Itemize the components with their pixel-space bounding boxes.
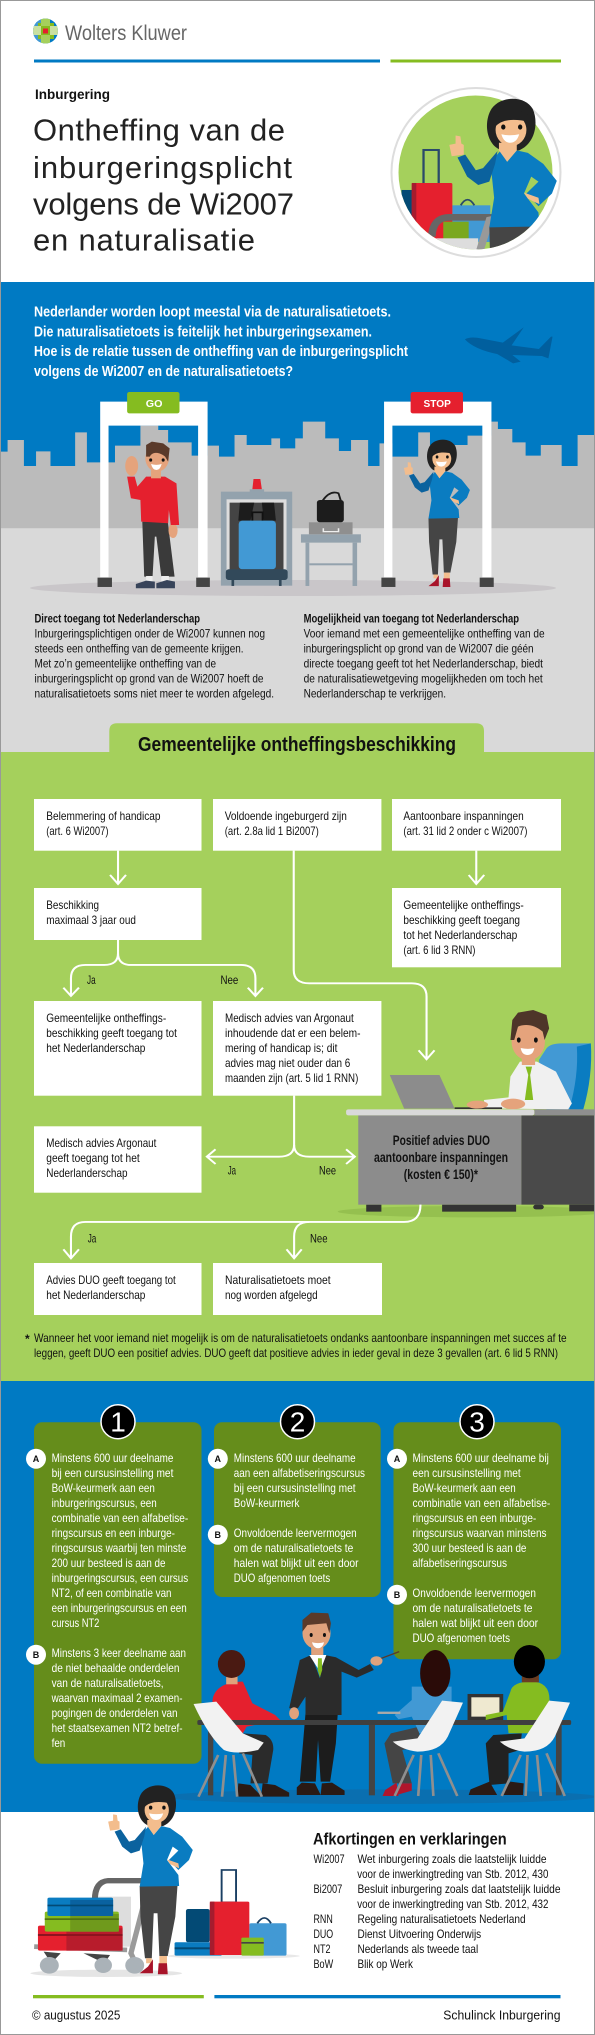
column: direct toegang: inburgeringsplicht op grond van de Wi2007 hoeft de — [34, 672, 264, 686]
number 1: 1 — [110, 1406, 126, 1438]
text A: BoW-keurmerk aan een — [412, 1481, 516, 1495]
box: Gemeentelijke ontheffingsbeschikking RNN: beschikking geeft toegang — [403, 913, 520, 927]
box: ontheffingsbeschikking geeft toegang — [34, 1001, 202, 1096]
text B — [234, 1526, 359, 1585]
box: Medisch advies Argonaut: Medisch advies Argonaut — [46, 1136, 157, 1150]
box: Voldoende ingeburgerd zijn: (art. 2.8a lid 1 Bi2007) — [225, 824, 319, 838]
text A — [52, 1451, 188, 1630]
text B: DUO afgenomen toets — [234, 1571, 330, 1585]
abbreviations list — [314, 1852, 561, 1971]
text A: combinatie van een alfabetise- — [52, 1511, 188, 1525]
box: Medisch advies van Argonaut: mering of handicap is; dit — [225, 1041, 338, 1055]
box: Medisch advies Argonaut — [34, 1126, 202, 1193]
text A: BoW-keurmerk — [234, 1496, 300, 1510]
column: mogelijkheid van toegang: inburgeringsplicht op grond van de Wi2007 die géén — [304, 642, 534, 656]
abbreviations list: Wet inburgering zoals die laatstelijk luidde — [358, 1852, 547, 1866]
box: Beschikking maximaal 3 jaar oud — [34, 888, 202, 940]
trolley — [34, 1881, 152, 1974]
box: ontheffingsbeschikking geeft toegang: Gemeentelijke ontheffings- — [46, 1011, 166, 1025]
woman at STOP gate — [404, 440, 470, 587]
man in red waving — [125, 442, 179, 588]
abbreviations list: Regeling naturalisatietoets Nederland — [358, 1912, 526, 1926]
text B: Onvoldoende leervermogen — [412, 1586, 536, 1600]
text A: bij een cursusinstelling met — [234, 1481, 356, 1495]
text A: Minstens 600 uur deelname bij — [412, 1451, 549, 1465]
column: direct toegang: Direct toegang tot Nederlanderschap — [34, 612, 200, 626]
illustration: luggage and trolley with woman — [30, 1785, 300, 1977]
title: volgens de Wi2007 — [33, 187, 294, 222]
intro text: volgens de Wi2007 en de naturalisatietoets? — [34, 364, 293, 380]
table with bags — [301, 493, 361, 586]
illustration: meeting with presenter — [194, 1613, 571, 1797]
chair 1 — [194, 1702, 264, 1797]
box: Naturalisatietoets moet nog worden afgelegd — [213, 1263, 382, 1315]
panel 2 — [208, 1405, 381, 1597]
abbreviations list: Wi2007 — [314, 1852, 345, 1866]
marker B: B — [215, 1530, 222, 1540]
box: Naturalisatietoets moet nog worden afgelegd: nog worden afgelegd — [225, 1288, 318, 1302]
box: Medisch advies van Argonaut: Medisch advies van Argonaut — [225, 1011, 354, 1025]
box: Gemeentelijke ontheffingsbeschikking RNN — [392, 888, 561, 967]
marker A: A — [33, 1454, 40, 1464]
panel: blue background — [0, 1381, 595, 1812]
gate GO — [98, 392, 210, 587]
box: Medisch advies van Argonaut: inhoudende dat er een belem- — [225, 1026, 360, 1040]
text A — [234, 1451, 365, 1510]
box: Positief advies DUO — [374, 1133, 508, 1182]
text B: de niet behaalde onderdelen — [52, 1661, 180, 1675]
labels: Ja and Nee third branch: Nee — [310, 1231, 328, 1245]
marker A — [26, 1449, 46, 1469]
text B: Minstens 3 keer deelname aan — [52, 1646, 186, 1660]
text B: het staatsexamen NT2 betref- — [52, 1721, 182, 1735]
marker B — [26, 1645, 46, 1665]
abbreviations list: NT2 — [314, 1942, 331, 1956]
box: Advies DUO: het Nederlanderschap — [46, 1288, 146, 1302]
text A: ringscursus waarbij ten minste — [52, 1541, 187, 1555]
abbreviations heading: Afkortingen en verklaringen — [313, 1829, 507, 1848]
labels: Ja and Nee second branch: Ja — [228, 1163, 236, 1177]
box: Medisch advies van Argonaut — [213, 1001, 381, 1096]
box: Aantoonbare inspanningen — [392, 799, 561, 851]
person in red — [213, 1650, 280, 1733]
gate STOP — [381, 392, 494, 587]
abbreviations list: Dienst Uitvoering Onderwijs — [358, 1927, 481, 1941]
box: Belemmering of handicap: (art. 6 Wi2007) — [46, 824, 109, 838]
text B: fen — [52, 1736, 65, 1750]
text B: waarvan maximaal 2 examen- — [51, 1691, 182, 1705]
number 2: 2 — [290, 1406, 305, 1438]
column: direct toegang: Met zo’n gemeentelijke ontheffing van de — [34, 657, 216, 671]
text A: inburgeringscursus, een — [52, 1496, 157, 1510]
presenter trousers — [297, 1713, 345, 1795]
abbreviations list: Blik op Werk — [358, 1957, 414, 1971]
illustration: security scene GO and STOP — [98, 392, 494, 588]
number 1 — [101, 1405, 135, 1439]
footer brand: Schulinck Inburgering — [443, 2007, 560, 2022]
illustration: woman in circle with luggage — [390, 87, 562, 258]
box: Positief advies DUO: (kosten € 150)* — [404, 1167, 479, 1182]
column: direct toegang: Inburgeringsplichtigen onder de Wi2007 kunnen nog — [34, 627, 265, 641]
labels: Ja and Nee first branch: Nee — [220, 973, 239, 987]
marker A: A — [394, 1454, 401, 1464]
column: mogelijkheid van toegang — [304, 612, 545, 701]
text B: Onvoldoende leervermogen — [234, 1526, 357, 1540]
labels: Ja and Nee second branch — [228, 1163, 336, 1177]
number 3: 3 — [469, 1406, 485, 1438]
box: Advies DUO: Advies DUO geeft toegang tot — [46, 1273, 176, 1287]
box: ontheffingsbeschikking geeft toegang: beschikking geeft toegang tot — [46, 1026, 177, 1040]
chair 3 — [500, 1701, 570, 1796]
text A: BoW-keurmerk aan een — [52, 1481, 155, 1495]
footer date: © augustus 2025 — [32, 2007, 120, 2022]
text B: van de naturalisatietoets, — [52, 1676, 164, 1690]
abbreviations list: Bi2007 — [314, 1882, 343, 1896]
header background — [0, 0, 595, 282]
box: Gemeentelijke ontheffingsbeschikking RNN: tot het Nederlanderschap — [403, 928, 518, 942]
footnote — [25, 1331, 567, 1360]
box: Positief advies DUO: aantoonbare inspanningen — [374, 1150, 508, 1165]
text A: Minstens 600 uur deelname — [234, 1451, 356, 1465]
marker A: A — [215, 1454, 222, 1464]
labels: Ja and Nee second branch: Nee — [319, 1163, 336, 1177]
marker B: B — [394, 1590, 401, 1600]
abbreviations list: voor de inwerkingtreding van Stb. 2012, 432 — [357, 1897, 549, 1911]
box: ontheffingsbeschikking geeft toegang: het Nederlanderschap — [46, 1041, 146, 1055]
box: Aantoonbare inspanningen: Aantoonbare inspanningen — [403, 809, 524, 823]
box: Beschikking maximaal 3 jaar oud: maximaal 3 jaar oud — [46, 913, 136, 927]
marker A — [208, 1449, 228, 1469]
intro text: Die naturalisatietoets is feitelijk het inburgeringsexamen. — [34, 325, 372, 341]
woman with thumb up — [108, 1785, 193, 1974]
labels: Ja and Nee third branch: Ja — [88, 1231, 97, 1245]
suitcases on trolley — [38, 1898, 123, 1951]
x-ray scanner with suitcase — [221, 479, 292, 586]
text A: een inburgeringscursus en een — [52, 1601, 187, 1615]
intro text — [34, 305, 408, 380]
text A: combinatie van een alfabetise- — [412, 1496, 550, 1510]
footer rule — [33, 1995, 560, 1998]
text B: om de naturalisatietoets te — [412, 1601, 533, 1615]
box: Voldoende ingeburgerd zijn — [213, 799, 381, 851]
text A: cursus NT2 — [52, 1616, 100, 1630]
box: Voldoende ingeburgerd zijn: Voldoende ingeburgerd zijn — [225, 809, 347, 823]
text A: NT2, of een combinatie van — [52, 1586, 172, 1600]
presenter — [289, 1613, 399, 1719]
icon: airplane — [465, 327, 553, 363]
abbreviations list: DUO — [314, 1927, 333, 1941]
illustration: desk with man — [338, 1010, 595, 1217]
arrows: flowchart top — [63, 851, 484, 1059]
box: Naturalisatietoets moet nog worden afgelegd: Naturalisatietoets moet — [225, 1273, 331, 1287]
text A: 200 uur besteed is aan de — [52, 1556, 166, 1570]
gate STOP: STOP — [424, 400, 451, 410]
text A: aan een alfabetiseringscursus — [234, 1466, 365, 1480]
table legs — [208, 1723, 562, 1795]
box: Gemeentelijke ontheffingsbeschikking RNN: (art. 6 lid 3 RNN) — [403, 943, 476, 957]
text B — [412, 1586, 538, 1645]
number 2 — [280, 1405, 314, 1439]
marker B: B — [33, 1650, 40, 1660]
logo: Wolters Kluwer — [33, 18, 187, 45]
column: mogelijkheid van toegang: directe toegang geeft tot het Nederlanderschap, biedt — [304, 657, 544, 671]
table top — [197, 1720, 571, 1725]
column: mogelijkheid van toegang: Mogelijkheid van toegang tot Nederlanderschap — [304, 612, 519, 626]
box: Medisch advies Argonaut: Nederlanderschap — [46, 1166, 128, 1180]
gate GO: GO — [146, 400, 162, 410]
abbreviations list: Besluit inburgering zoals dat laatstelijk luidde — [358, 1882, 561, 1896]
number 3 — [460, 1405, 494, 1439]
panel 3 — [387, 1405, 561, 1659]
text A: bij een cursusinstelling met — [52, 1466, 174, 1480]
marker B — [387, 1585, 407, 1605]
text A: alfabetiseringscursus — [412, 1556, 507, 1570]
abbreviations list: Nederlands als tweede taal — [358, 1942, 478, 1956]
person in green legs — [469, 1733, 524, 1795]
header rule — [34, 60, 561, 62]
woman in blue legs — [383, 1727, 419, 1796]
box: Medisch advies van Argonaut: advies mag niet ouder dan 6 — [225, 1056, 351, 1070]
column: direct toegang — [34, 612, 274, 701]
marker A — [387, 1449, 407, 1469]
box: Positief advies DUO: Positief advies DUO — [393, 1133, 490, 1148]
column: mogelijkheid van toegang: Nederlanderschap te verkrijgen. — [304, 687, 446, 701]
text B: halen wat blijkt uit een door — [412, 1616, 538, 1630]
labels: Ja and Nee first branch: Ja — [87, 973, 96, 987]
labels: Ja and Nee first branch — [87, 973, 239, 987]
abbreviations list: RNN — [314, 1912, 333, 1926]
text B: pogingen de onderdelen van — [52, 1706, 178, 1720]
marker B — [208, 1525, 228, 1545]
title: inburgeringsplicht — [33, 150, 292, 185]
title — [33, 113, 294, 258]
text A: ringscursus en een inburge- — [412, 1511, 536, 1525]
text B: halen wat blijkt uit een door — [234, 1556, 359, 1570]
intro text: Nederlander worden loopt meestal via de naturalisatietoets. — [34, 305, 391, 321]
footnote: * — [25, 1332, 30, 1346]
abbreviations list: BoW — [314, 1957, 334, 1971]
text B: DUO afgenomen toets — [412, 1631, 510, 1645]
text A: een cursusinstelling met — [412, 1466, 521, 1480]
woman in blue — [378, 1650, 452, 1733]
heading: Gemeentelijke ontheffingsbeschikking: Gemeentelijke ontheffingsbeschikking — [138, 734, 456, 756]
box: Belemmering of handicap — [34, 799, 202, 851]
box: Beschikking maximaal 3 jaar oud: Beschikking — [46, 898, 99, 912]
column: mogelijkheid van toegang: Voor iemand met een gemeentelijke ontheffing van de — [304, 627, 545, 641]
chair 2 — [393, 1701, 463, 1796]
illustration: meeting floor shadow — [163, 1789, 595, 1804]
labels: Ja and Nee third branch — [88, 1231, 328, 1245]
suitcases right — [175, 1870, 287, 1956]
box: Belemmering of handicap: Belemmering of handicap — [46, 809, 161, 823]
section label: Inburgering — [35, 86, 110, 102]
intro text: Hoe is de relatie tussen de ontheffing van de inburgeringsplicht — [34, 344, 408, 360]
abbreviations list: voor de inwerkingtreding van Stb. 2012, 430 — [357, 1867, 549, 1881]
box: Gemeentelijke ontheffingsbeschikking RNN: Gemeentelijke ontheffings- — [403, 898, 524, 912]
floor shadow — [30, 580, 556, 596]
panel 1 — [26, 1405, 202, 1764]
title: Ontheffing van de — [33, 113, 285, 148]
panel: green flowchart background — [0, 723, 595, 1382]
text A: inburgeringscursus, een cursus — [52, 1571, 188, 1585]
text A: ringscursus en een inburge- — [52, 1526, 175, 1540]
column: mogelijkheid van toegang: de naturalisatiewetgeving mogelijkheden om toch het — [304, 672, 543, 686]
title: en naturalisatie — [33, 223, 255, 258]
column: direct toegang: naturalisatietoets soms niet meer te worden afgelegd. — [34, 687, 274, 701]
band: blue background with skyline — [0, 282, 595, 752]
box: Aantoonbare inspanningen: (art. 31 lid 2 onder c Wi2007) — [403, 824, 528, 838]
text B: om de naturalisatietoets te — [234, 1541, 354, 1555]
text A: 300 uur besteed is aan de — [412, 1541, 527, 1555]
column: direct toegang: steeds een ontheffing van de gemeente krijgen. — [34, 642, 244, 656]
text A — [412, 1451, 550, 1570]
arrows: flowchart bottom — [63, 1096, 420, 1258]
logo: Wolters Kluwer: Wolters Kluwer — [65, 22, 187, 45]
box: Medisch advies Argonaut: geeft toegang tot het — [46, 1151, 140, 1165]
box: Advies DUO — [34, 1263, 202, 1315]
box: Medisch advies van Argonaut: maanden zijn (art. 5 lid 1 RNN) — [225, 1071, 358, 1085]
text A: Minstens 600 uur deelname — [52, 1451, 174, 1465]
text A: ringscursus waarvan minstens — [412, 1526, 546, 1540]
text B — [51, 1646, 186, 1750]
person in green with tablet — [468, 1645, 550, 1733]
person in red legs — [237, 1733, 289, 1797]
